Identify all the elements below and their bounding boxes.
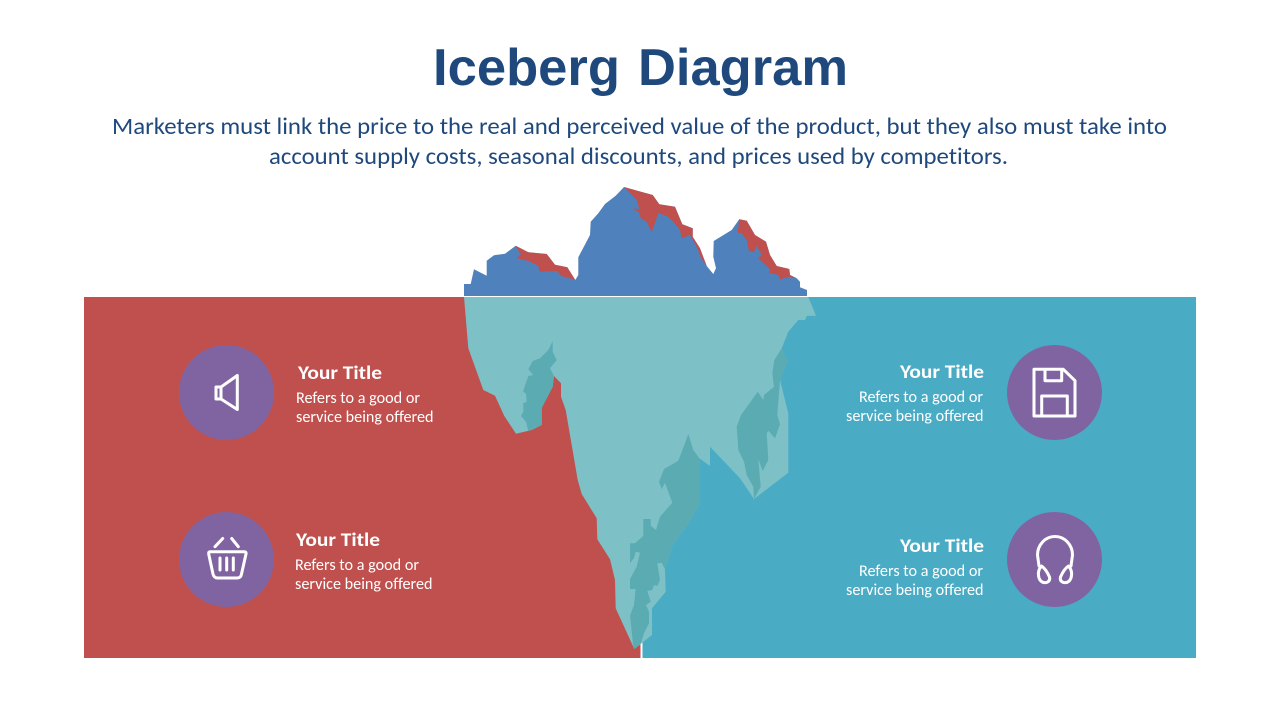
item description: service being offered — [296, 408, 434, 427]
item heading: Your Title — [295, 529, 380, 552]
title: Diagram — [638, 39, 848, 97]
item heading: Your Title — [297, 362, 382, 385]
item description — [846, 388, 984, 426]
item description: Refers to a good or — [859, 388, 983, 407]
iceberg tip silhouette — [464, 187, 807, 296]
item: bottom left — [179, 512, 432, 607]
subtitle text block — [112, 112, 1167, 171]
title: Iceberg — [433, 39, 620, 97]
item: bottom right — [846, 512, 1102, 607]
item heading: Your Title — [899, 535, 984, 558]
red shaded facet centre — [624, 187, 707, 266]
item description — [295, 556, 432, 594]
subtitle text block: account supply costs, seasonal discounts, and prices used by competitors. — [269, 142, 1008, 171]
item: top left — [179, 345, 434, 440]
item description: Refers to a good or — [296, 389, 420, 408]
subtitle text block: Marketers must link the price to the real and perceived value of the product, but they also must take into — [112, 112, 1167, 141]
submerged iceberg body — [464, 297, 816, 649]
title — [433, 39, 848, 97]
icon: speaker — [216, 376, 237, 410]
item description: Refers to a good or — [859, 562, 983, 581]
item description: service being offered — [846, 581, 984, 600]
panel: right blue background — [642, 297, 1196, 658]
icon: headphones — [1038, 536, 1072, 583]
panel: left red background — [84, 297, 640, 658]
dark crevice right — [737, 348, 788, 499]
item: top right — [846, 345, 1102, 440]
icon circle — [1007, 512, 1102, 607]
item heading: Your Title — [899, 361, 984, 384]
icon: basket — [209, 538, 246, 578]
icon circle — [179, 345, 274, 440]
item description: service being offered — [846, 407, 984, 426]
icon circle — [1007, 345, 1102, 440]
icon: floppy disk — [1034, 369, 1075, 416]
red shaded facet left — [516, 246, 575, 280]
icon circle — [179, 512, 274, 607]
iceberg below water — [464, 297, 816, 649]
red shaded facet right — [738, 219, 797, 279]
iceberg above water — [464, 187, 807, 296]
dark crevice bottom — [630, 434, 699, 649]
dark crevice left — [521, 341, 557, 431]
item description — [846, 562, 984, 600]
item description — [296, 389, 434, 427]
item description: Refers to a good or — [295, 556, 419, 575]
item description: service being offered — [295, 575, 432, 594]
